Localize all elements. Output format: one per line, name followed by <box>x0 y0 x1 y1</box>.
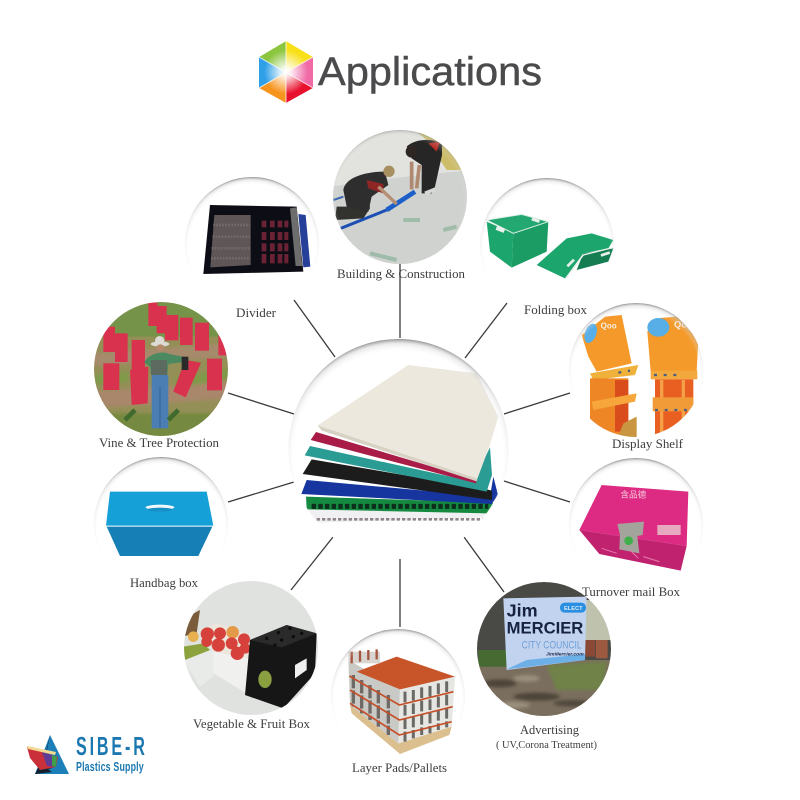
caption: Vegetable & Fruit Box <box>193 717 311 731</box>
caption: Layer Pads/Pallets <box>352 761 447 775</box>
icon: rainbow hexagon logo <box>259 41 313 103</box>
photo: orange display shelves: Qoo <box>601 321 617 330</box>
panel: building & construction <box>330 127 470 281</box>
icon: triangle with colour flag <box>27 735 69 774</box>
caption: Divider <box>236 306 277 320</box>
caption: treatment note: ( UV,Corona Treatment) <box>496 740 597 751</box>
panel: handbag box <box>94 457 228 591</box>
panel: central corrugated sheets <box>288 339 508 559</box>
panel: advertising <box>473 580 617 751</box>
photo: pallet with orange layer pads <box>348 649 455 754</box>
photo: green folding boxes <box>487 214 613 279</box>
photo: black divider tray <box>203 205 310 274</box>
photo: workers laying floor protection <box>330 127 470 267</box>
photo: campaign yard sign: CITY COUNCIL <box>522 639 582 651</box>
panel: vegetable & fruit box <box>180 580 323 731</box>
photo: blue handbag box <box>106 492 213 556</box>
photo: orange display shelves: Qo <box>674 319 687 329</box>
panel: display shelf <box>569 303 703 451</box>
photo: fruit tray and black box <box>184 581 318 715</box>
panel: folding box <box>480 178 614 317</box>
panel: vine & tree protection <box>92 300 232 450</box>
tagline: Plastics Supply <box>76 760 144 775</box>
caption: Display Shelf <box>612 437 684 451</box>
brand logo: SIBE-R <box>27 731 148 775</box>
photo: campaign yard sign <box>477 582 611 716</box>
caption: Handbag box <box>130 576 199 590</box>
caption: Folding box <box>524 303 588 317</box>
title: Applications <box>318 50 542 94</box>
caption: Vine & Tree Protection <box>99 436 220 450</box>
photo: campaign yard sign: ELECT <box>564 606 583 612</box>
photo: pink mail box: 含品德 <box>620 488 647 500</box>
photo: woman among red tree guards <box>92 300 232 440</box>
caption: Building & Construction <box>337 267 466 281</box>
photo: orange display shelves <box>582 315 698 440</box>
photo: campaign yard sign: MERCIER <box>507 618 583 637</box>
connector lines <box>228 263 570 627</box>
caption: turnover mail box: Turnover mail Box <box>582 585 681 599</box>
panel: turnover mail box <box>569 458 703 571</box>
panel: divider <box>185 177 319 320</box>
panel: layer pads / pallets <box>331 629 465 775</box>
wordmark: SIBE-R <box>76 731 148 761</box>
photo: campaign yard sign: Jim <box>507 601 538 621</box>
photo: campaign yard sign: JimMercier.com <box>546 651 584 657</box>
caption: Advertising <box>520 723 580 737</box>
